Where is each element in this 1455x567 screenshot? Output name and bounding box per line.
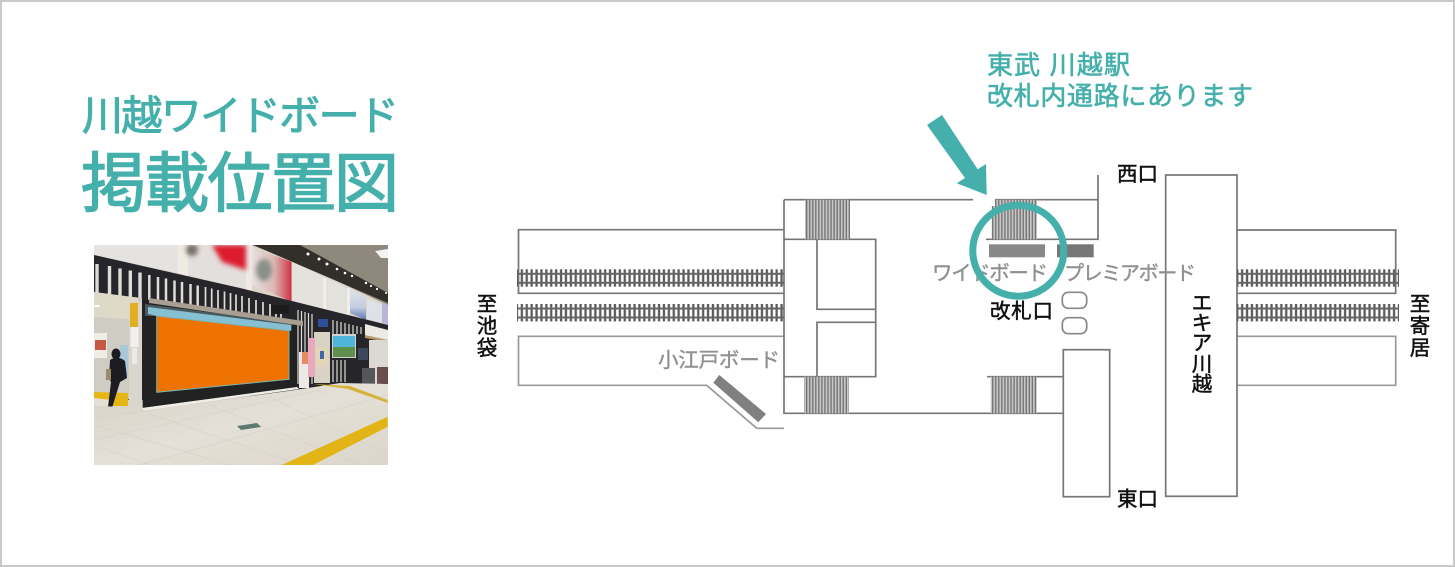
label: wide board: ワイドボード <box>932 262 1048 285</box>
label: to Ikebukuro: 至 <box>477 293 497 316</box>
left upper track <box>517 269 784 287</box>
label: ticket gate: 改札口 <box>990 300 1053 323</box>
label: koedo board: 小江戸ボード <box>658 349 780 372</box>
building: Ekia Kawagoe <box>1166 175 1237 496</box>
pillar <box>129 302 142 407</box>
right lower platform <box>1237 336 1396 385</box>
railway tracks <box>517 269 1399 321</box>
floor sign <box>237 423 261 430</box>
label: Ekia Kawagoe: エ <box>1192 292 1212 315</box>
station map <box>517 175 1399 497</box>
upper concourse wall <box>784 175 1098 239</box>
ticket gate icons <box>1062 292 1087 334</box>
left upper platform <box>518 230 784 293</box>
title line 1: 川越ワイドボード <box>82 93 399 139</box>
left doorway <box>94 292 142 402</box>
label: east exit: 東口 <box>1117 488 1158 511</box>
label: west exit: 西口 <box>1117 163 1158 186</box>
title line 2: 掲載位置図 <box>81 147 399 220</box>
right upper platform <box>1237 230 1396 293</box>
left lower track <box>517 304 784 321</box>
ad panels <box>94 245 388 325</box>
blurred ad pictures <box>186 244 272 281</box>
station concourse outline <box>784 200 1063 413</box>
koedo board marker <box>713 375 766 422</box>
person <box>108 348 127 408</box>
label: premium board: プレミアボード <box>1064 262 1196 285</box>
orange advert <box>157 316 289 392</box>
east block <box>1063 350 1110 497</box>
photo: station wide board <box>94 244 388 465</box>
wide board marker <box>989 244 1045 257</box>
right upper track <box>1237 269 1399 287</box>
label: to Yorii: 居 <box>1410 337 1430 360</box>
ceiling lights <box>306 252 387 294</box>
left lower platform <box>518 336 784 428</box>
right lower track <box>1237 304 1399 321</box>
label: to Ikebukuro: 袋 <box>477 337 497 360</box>
floor tile lines <box>94 390 388 465</box>
floor <box>94 383 388 465</box>
sign logo <box>271 305 289 314</box>
ceiling <box>252 245 388 305</box>
label: Ekia Kawagoe: 川 <box>1192 353 1212 376</box>
striped band <box>94 255 388 400</box>
label: to Yorii: 至 <box>1410 293 1430 316</box>
label: to Yorii: 寄 <box>1410 315 1430 338</box>
yellow tactile paving <box>282 417 388 465</box>
callout text: 東武 川越駅 <box>987 50 1130 80</box>
label: Ekia Kawagoe: キ <box>1192 312 1212 335</box>
callout text: 改札内通路にあります <box>987 81 1253 111</box>
wide board wall <box>142 300 282 408</box>
premium board marker <box>1057 244 1094 257</box>
ceiling dark strip <box>253 245 388 303</box>
arrow <box>927 115 987 195</box>
highlight circle <box>973 205 1064 296</box>
label: to Ikebukuro: 池 <box>477 315 497 338</box>
right side of station <box>314 332 330 383</box>
label: Ekia Kawagoe: 越 <box>1192 373 1212 396</box>
stairs <box>804 200 1037 413</box>
label: Ekia Kawagoe: ア <box>1192 332 1212 355</box>
ceiling lamp <box>375 249 388 258</box>
